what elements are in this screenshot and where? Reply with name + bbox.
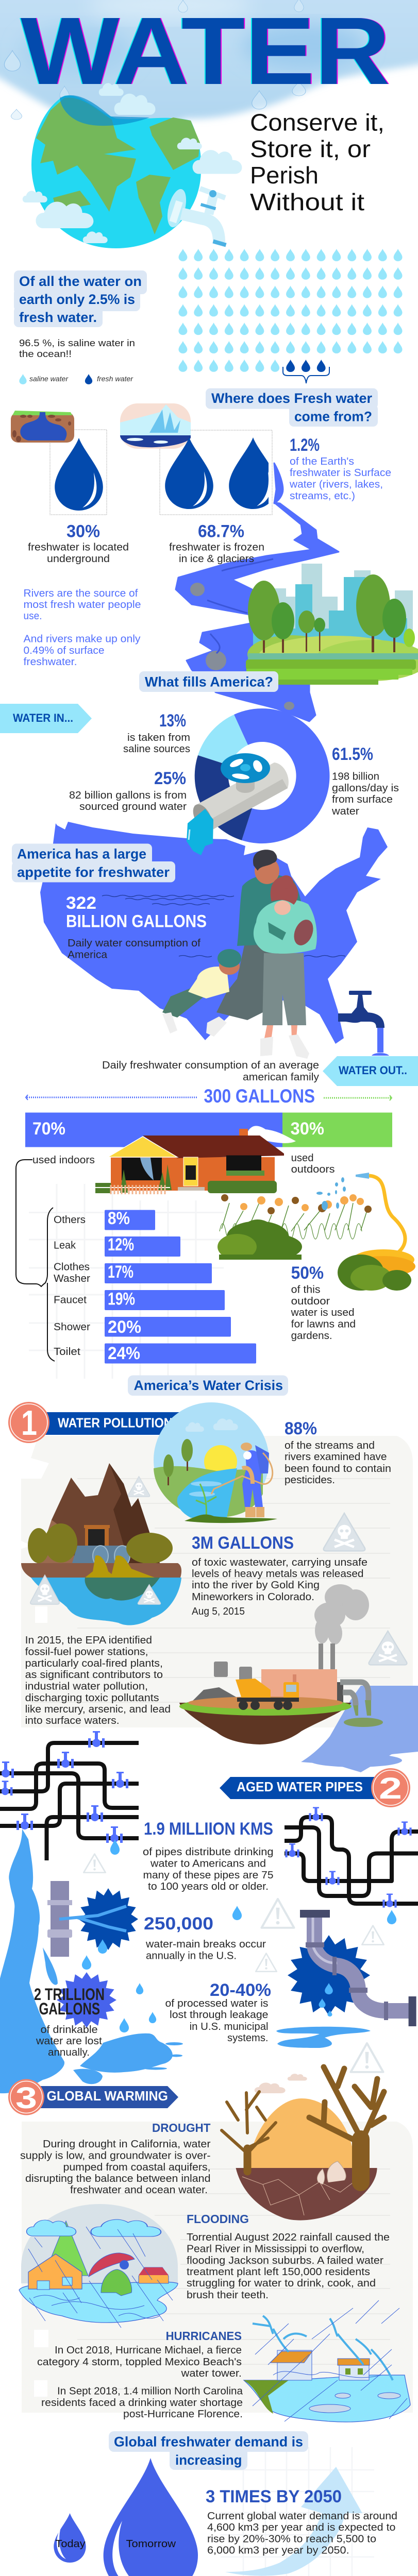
stat: 50% outdoor: 50% xyxy=(291,1263,324,1283)
valves left xyxy=(0,1731,128,1843)
text: EPA: fossil-fuel power stations, xyxy=(25,1647,148,1658)
stat: 2 trillion gallons: GALLONS xyxy=(39,1999,100,2018)
stat: 88% pesticides: 88% xyxy=(285,1419,317,1438)
text: daily family consumption: Daily freshwater consumption of an average xyxy=(102,1060,319,1071)
title: WATER xyxy=(22,0,391,105)
heading: global freshwater demand xyxy=(109,2431,308,2470)
map of America xyxy=(40,822,388,1044)
illustration: hose xyxy=(316,1173,415,1277)
stat: 1.9 million kms xyxy=(143,1819,273,1892)
text: flooding: FLOODING xyxy=(187,2212,249,2226)
chart: indoor usage bars: 8% xyxy=(108,1209,130,1228)
stat: 13% saline: saline sources xyxy=(123,743,190,755)
banner: global warming xyxy=(8,2079,178,2115)
subtitle: Without it xyxy=(250,189,364,215)
stat: 68.7% frozen xyxy=(169,521,264,565)
illustration: family xyxy=(162,850,317,1059)
heading: America's water crisis: America’s Water Crisis xyxy=(134,1378,283,1393)
stat: 88% pesticides: of the streams and xyxy=(285,1440,375,1451)
text: surface water: freshwater is Surface xyxy=(290,467,391,479)
icon: today drop: Today xyxy=(56,2538,86,2550)
icon: tomorrow drop: Tomorrow xyxy=(126,2538,176,2550)
icons: skull warnings on lake xyxy=(30,1575,160,1604)
stat: 88% pesticides: rivers examined have xyxy=(285,1451,387,1463)
stat: 30% underground: 30% xyxy=(66,521,100,541)
stat: 1.9 million kms: many of these pipes are 75 xyxy=(143,1870,273,1881)
illustration: burst pipe xyxy=(47,1881,138,1957)
subtitle xyxy=(250,109,384,215)
illustration: leaking pipe network left xyxy=(0,1743,139,1860)
illustration: flowers xyxy=(220,1194,372,1239)
chart: indoor usage bars: 12% xyxy=(108,1235,134,1255)
banner: water pollution xyxy=(8,1402,197,1443)
icon: fresh water drop underground xyxy=(55,438,103,511)
tag: water in: WATER IN... xyxy=(13,711,73,724)
stat: 322 billion gallons xyxy=(66,893,207,960)
stat: 3M gallons: of toxic wastewater, carrying unsafe xyxy=(192,1557,367,1568)
illustration: farmer spraying xyxy=(154,1402,277,1523)
icon: frozen water drops xyxy=(165,437,277,509)
heading: what fills America xyxy=(139,671,278,692)
chart: indoor usage bars: Clothes xyxy=(54,1262,90,1273)
stat: 25% ground water: 25% xyxy=(154,769,186,788)
stat: 61.5% surface water: water xyxy=(331,806,359,817)
icon: iceberg xyxy=(120,403,191,449)
background: watercolor sky xyxy=(0,0,418,126)
chart: indoor usage bars: Toilet xyxy=(54,1346,80,1358)
chart: indoor usage bars: Others xyxy=(54,1214,86,1226)
stat: 61.5% surface water: 61.5% xyxy=(332,744,373,764)
stat: 20-40%: in U.S. municipal xyxy=(190,2021,269,2032)
stat: 20-40%: 20-40% xyxy=(210,1980,271,2000)
stat: 1.9 million kms: to 100 years old or older. xyxy=(148,1881,269,1892)
icon: dark faucet xyxy=(338,991,389,1056)
icon: faucet on globe xyxy=(164,187,227,247)
icons: caution triangles xyxy=(83,1854,384,2072)
illustration: pipe network right xyxy=(285,1817,418,1904)
text: daily family consumption: american family xyxy=(243,1072,319,1083)
river rocks xyxy=(190,559,294,710)
text: rivers: use. xyxy=(24,611,42,622)
stat: 68.7% frozen: in ice & glaciers xyxy=(179,553,254,565)
river xyxy=(176,463,339,721)
chart: water drops grid xyxy=(175,246,406,375)
stat: 250,000 xyxy=(144,1914,266,1962)
stat: 25% ground water: 82 billion gallons is from xyxy=(69,790,187,801)
text: flooding: treatment plant left 150,000 residents xyxy=(187,2266,370,2278)
text: surface water: water (rivers, lakes, xyxy=(289,479,383,490)
text: rivers: And rivers make up only xyxy=(24,634,140,645)
bracket under fresh drops xyxy=(283,367,329,383)
text: saline water: 96.5 %, is saline water in xyxy=(19,337,135,348)
text: drought: pumped from coastal aquifers, xyxy=(63,2162,210,2173)
stat: 2 trillion gallons xyxy=(34,1972,116,2058)
label: used outdoors: used xyxy=(291,1153,314,1164)
chart: indoor usage bars: Faucet xyxy=(54,1294,87,1306)
icon: tomorrow drop xyxy=(104,2458,198,2576)
illustration: hurricane xyxy=(244,2300,410,2422)
text: hurricanes: post-Hurricane Florence. xyxy=(123,2409,243,2420)
stat: 2 trillion gallons: water are lost xyxy=(36,2036,102,2047)
banner: aged water pipes: 2 xyxy=(379,1772,402,1805)
stat: 50% outdoor: gardens. xyxy=(291,1330,332,1342)
text: EPA: discharging toxic pollutants xyxy=(25,1692,159,1704)
text: flooding xyxy=(187,2212,390,2301)
legend xyxy=(19,374,133,384)
stat: 1.9 million kms: of pipes distribute drinking xyxy=(143,1846,273,1858)
stat: 13% saline xyxy=(123,711,190,755)
heading: 2.5% fresh water: Of all the water on xyxy=(19,274,142,289)
stat: 322 billion gallons: Daily water consumption of xyxy=(68,938,200,949)
stat: 3M gallons xyxy=(192,1533,367,1617)
stat: 322 billion gallons: BILLION GALLONS xyxy=(66,911,207,931)
stat: 30% underground xyxy=(28,521,129,565)
text: surface water: of the Earth's xyxy=(290,456,354,467)
text: EPA: as significant contributors to xyxy=(25,1669,163,1681)
panel: pollution paper xyxy=(10,1436,413,1727)
stat: 1.9 million kms: 1.9 MILLIION KMS xyxy=(144,1819,273,1839)
stat: 250,000: 250,000 xyxy=(144,1914,213,1934)
grid background for demand xyxy=(221,2447,374,2576)
chart: donut water sources xyxy=(195,708,330,843)
chart: 70/30 bar xyxy=(25,1113,392,1147)
subtitle: Conserve it, xyxy=(250,109,384,136)
label: used outdoors: outdoors xyxy=(291,1164,335,1175)
banner: aged water pipes xyxy=(220,1768,410,1807)
text: rivers: freshwater. xyxy=(24,656,77,668)
text: flooding: Torrential August 2022 rainfall caused the xyxy=(187,2232,390,2243)
stat: 61.5% surface water: from surface xyxy=(332,794,393,805)
icon: underground water xyxy=(11,411,74,443)
stat: 61.5% surface water: gallons/day is xyxy=(332,783,399,794)
text: hurricanes: residents faced a drinking water shortage xyxy=(41,2397,243,2409)
subtitle: Store it, or xyxy=(250,135,371,162)
stat: 3M gallons: into the river by Gold King xyxy=(192,1580,320,1591)
label: used outdoors xyxy=(291,1153,335,1175)
water stream xyxy=(0,1829,64,2093)
stat: 2 trillion gallons: of drinkable xyxy=(41,2024,98,2036)
stat: 13% saline: is taken from xyxy=(127,732,190,743)
heading: 2.5% fresh water: earth only 2.5% is xyxy=(19,292,135,307)
text: drought: DROUGHT xyxy=(152,2121,210,2134)
text: flooding: flooding Jackson suburbs. A failed water xyxy=(187,2255,383,2266)
stat: 250,000: annually in the U.S. xyxy=(146,1951,237,1962)
heading: America's appetite xyxy=(12,844,175,882)
stat: 20-40%: lost through leakage xyxy=(170,2009,268,2021)
text: EPA: particularly coal-fired plants, xyxy=(25,1658,163,1669)
text: saline water: the ocean!! xyxy=(19,348,72,359)
text: hurricanes xyxy=(37,2329,243,2420)
stat: 88% pesticides xyxy=(285,1419,391,1486)
puddle xyxy=(43,1947,183,2084)
text: flooding: Pearl River in Mississippi to overflow, xyxy=(187,2244,364,2255)
stat: 88% pesticides: been found to contain xyxy=(285,1463,391,1475)
text: drought: freshwater and ocean water. xyxy=(70,2184,208,2196)
stat: 3 times by 2050: rise by 20%-30% to reach 5,500 to xyxy=(207,2534,376,2545)
heading: where does fresh water come from: Where does Fresh water xyxy=(211,391,372,406)
icons: skull warnings xyxy=(128,1477,407,1665)
chart: 70/30 bar: 70% xyxy=(32,1119,65,1139)
heading: what fills America: What fills America? xyxy=(145,674,273,689)
illustration: old pipe with burst xyxy=(276,1910,416,2048)
text: EPA xyxy=(25,1635,171,1726)
stat: 3M gallons: Aug 5, 2015 xyxy=(192,1606,245,1617)
illustration: pipe and valve wheel xyxy=(187,753,289,855)
illustration: riverbank xyxy=(246,653,418,685)
banner: water pollution: 1 xyxy=(21,1403,37,1443)
heading: global freshwater demand: Global freshwater demand is xyxy=(114,2434,303,2449)
chart: indoor usage bars: Washer xyxy=(54,1273,90,1284)
stat: 20-40% xyxy=(165,1980,271,2044)
tag: water out xyxy=(323,1056,418,1086)
stat: 50% outdoor: for lawns and xyxy=(291,1319,356,1330)
woman xyxy=(254,875,317,1059)
stat: 3 times by 2050: Current global water demand is around xyxy=(207,2511,397,2522)
subtitle: Perish xyxy=(250,162,319,189)
panel: global warming paper xyxy=(10,2122,413,2413)
text: EPA: like mercury, arsenic, and lead xyxy=(25,1704,171,1715)
stat: 2 trillion gallons: 2 TRILLION xyxy=(34,1985,105,2004)
title: WATER xyxy=(20,0,389,105)
chart: indoor usage bars: 20% xyxy=(108,1317,141,1337)
illustration: flood xyxy=(19,2204,178,2328)
stat: 25% ground water xyxy=(69,769,187,812)
stat: 3 times by 2050: 3 TIMES BY 2050 xyxy=(206,2487,342,2506)
heading: America's appetite: appetite for freshwater xyxy=(17,865,170,880)
stat: 322 billion gallons: 322 xyxy=(66,893,96,913)
man xyxy=(216,850,304,1020)
heading: where does fresh water come from xyxy=(206,388,378,427)
heading: where does fresh water come from: come from? xyxy=(294,409,372,425)
text: saline water xyxy=(19,337,135,359)
banner: water pollution: WATER POLLUTION xyxy=(58,1415,172,1431)
icon: growth arrow xyxy=(225,2467,362,2576)
stat: 2 trillion gallons: annually. xyxy=(48,2047,90,2058)
chart: indoor usage bars: 17% xyxy=(108,1262,133,1282)
stat: 3 times by 2050: 6,000 km3 per year by 2050. xyxy=(207,2545,349,2556)
stat: 50% outdoor xyxy=(291,1263,356,1342)
text: drought: During drought in California, water xyxy=(43,2139,211,2150)
brackets for indoor usage xyxy=(16,1160,55,1361)
heading: America's appetite: America has a large xyxy=(17,846,146,862)
stat: 322 billion gallons: America xyxy=(68,949,108,960)
text: flooding: brush their teeth. xyxy=(187,2290,269,2301)
drops: scattered xyxy=(82,1839,396,2032)
text: surface water: streams, etc.) xyxy=(290,490,355,502)
stat: 20-40%: of processed water is xyxy=(165,1998,268,2009)
heading: 2.5% fresh water: fresh water. xyxy=(19,310,97,325)
label: used indoors: used indoors xyxy=(32,1155,95,1166)
text: surface water xyxy=(289,435,391,502)
illustration: bushes xyxy=(218,1219,411,1291)
chart: indoor usage bars: 24% xyxy=(108,1344,140,1363)
text: flooding: struggling for water to drink, cook, and xyxy=(187,2278,376,2289)
text: rivers xyxy=(24,588,141,668)
text: drought: disrupting the balance between inland xyxy=(25,2173,211,2184)
title: WATER xyxy=(21,0,390,105)
stat: 30% underground: freshwater is located xyxy=(28,542,129,553)
illustration: factory island xyxy=(179,1584,418,1772)
text: EPA: into surface waters. xyxy=(25,1715,120,1726)
banner: global warming: 3 xyxy=(15,2081,37,2115)
valves right xyxy=(285,1807,412,1908)
text: EPA: In 2015, the EPA identified xyxy=(25,1635,152,1646)
grid background for bars xyxy=(29,1184,224,1379)
text: rivers: most fresh water people xyxy=(24,599,141,611)
chart: indoor usage bars: 19% xyxy=(108,1289,135,1309)
legend: fresh water xyxy=(97,375,133,383)
text: hurricanes: water tower. xyxy=(181,2368,242,2379)
stat: 13% saline: 13% xyxy=(159,711,186,731)
chart: indoor usage bars xyxy=(54,1209,256,1363)
tag: water in xyxy=(0,704,92,733)
icon: today drop xyxy=(54,2513,86,2563)
text: rivers: 0.49% of surface xyxy=(24,645,104,656)
stat: 1.9 million kms: water to Americans and xyxy=(150,1858,266,1869)
text: hurricanes: category 4 storm, toppled Mexico Beach's xyxy=(37,2357,242,2368)
illustration: drought xyxy=(222,2067,384,2221)
stat: 68.7% frozen: 68.7% xyxy=(198,521,244,541)
chart: indoor usage bars: Shower xyxy=(54,1321,90,1333)
illustration: city and trees xyxy=(247,564,418,681)
heading: global freshwater demand: increasing xyxy=(175,2452,242,2468)
icon: clouds around globe xyxy=(23,83,242,243)
text: drought xyxy=(20,2121,211,2196)
stat: 88% pesticides: pesticides. xyxy=(285,1475,335,1486)
stat: 3 times by 2050 xyxy=(206,2487,397,2556)
text: daily family consumption xyxy=(102,1060,319,1083)
map waves xyxy=(102,895,345,957)
icon: earth globe xyxy=(31,95,201,248)
text: hurricanes: In Oct 2018, Hurricane Michael, a fierce xyxy=(55,2345,242,2356)
stat: 25% ground water: sourced ground water xyxy=(79,801,187,812)
heading: 2.5% fresh water xyxy=(14,270,147,327)
heading: 300 gallons: 300 GALLONS xyxy=(204,1086,315,1107)
stat: 3M gallons: 3M GALLONS xyxy=(192,1533,294,1553)
illustration: mine and polluted lake xyxy=(21,1463,181,1625)
stat: 250,000: water-main breaks occur xyxy=(145,1939,266,1950)
text: rivers: Rivers are the source of xyxy=(24,588,138,599)
banner: global warming: GLOBAL WARMING xyxy=(46,2088,168,2104)
stat: 50% outdoor: outdoor xyxy=(291,1296,330,1307)
chart: indoor usage bars: Leak xyxy=(54,1240,76,1251)
stat: 20-40%: systems. xyxy=(227,2032,268,2044)
stat: 61.5% surface water: 198 billion xyxy=(332,771,379,782)
illustration: house xyxy=(95,1126,296,1194)
text: hurricanes: HURRICANES xyxy=(166,2329,242,2343)
stat: 68.7% frozen: freshwater is frozen xyxy=(169,542,264,553)
text: hurricanes: In Sept 2018, 1.4 million North Carolina xyxy=(57,2385,243,2397)
kid xyxy=(162,949,241,1037)
stat: 3 times by 2050: 4,600 km3 per year and is expected to xyxy=(207,2522,396,2533)
stat: 3M gallons: Mineworkers in Colorado. xyxy=(192,1591,314,1603)
stat: 50% outdoor: of this xyxy=(291,1284,321,1296)
stat: 61.5% surface water xyxy=(331,744,399,817)
tag: water out: WATER OUT.. xyxy=(339,1064,407,1077)
chart: 70/30 bar: 30% xyxy=(291,1119,324,1139)
stat: 3M gallons: levels of heavy metals was released xyxy=(192,1568,364,1580)
banner: aged water pipes: AGED WATER PIPES xyxy=(237,1779,363,1794)
stat: 50% outdoor: water is used xyxy=(291,1307,355,1318)
dotted frames xyxy=(50,430,272,515)
heading: 300 gallons xyxy=(26,1086,392,1107)
stat: 30% underground: underground xyxy=(47,553,110,565)
legend: saline water xyxy=(29,375,69,383)
text: drought: supply is low, and groundwater is over- xyxy=(20,2150,210,2162)
text: EPA: industrial water pollution, xyxy=(25,1681,148,1692)
text: surface water: 1.2% xyxy=(290,435,320,455)
